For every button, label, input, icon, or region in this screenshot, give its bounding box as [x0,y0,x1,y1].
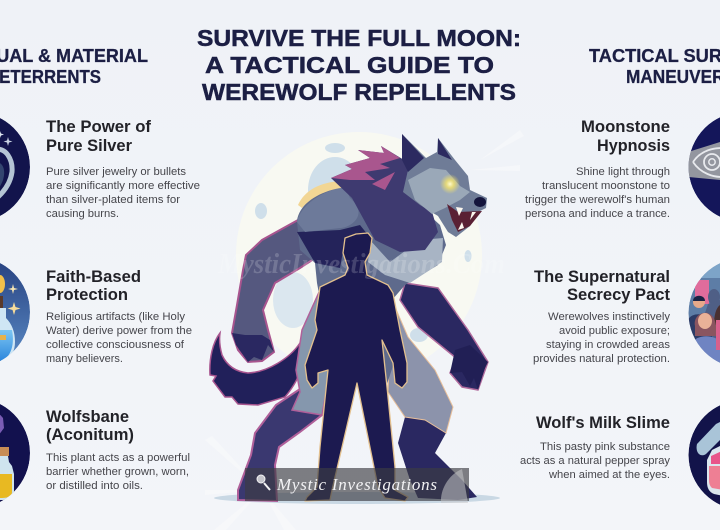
wolf right hand claws [450,345,488,390]
text: the power of pure silver: Pure Silver [46,137,133,155]
text: faith-based protection: Water) derive power from the [46,325,192,337]
wolf ears [402,134,452,172]
text: the supernatural secrecy pact [533,268,671,365]
wolf torso [297,170,446,390]
wolf mane highlights [331,146,400,190]
text: the power of pure silver: Pure silver jewelry or bullets [46,166,186,178]
banner text: Mystic Investigations [276,475,437,494]
text: wolfsbane: barrier whether grown, worn, [46,466,189,478]
text: wolf's milk slime [520,414,670,481]
text: the power of pure silver: causing burns. [46,208,119,220]
wolf left arm [232,220,320,362]
title [197,25,521,105]
illustration: werewolf [210,134,488,501]
wolf right lower leg [398,400,477,500]
text: faith-based protection: Religious artifacts (like Holy [46,311,185,323]
watermark: site name: MysticInvestigations.Com [217,249,505,280]
title: WEREWOLF REPELLENTS [202,79,516,105]
title: SURVIVE THE FULL MOON: [197,25,521,51]
wolf head [402,134,487,237]
text: faith-based protection: Faith-Based [46,268,141,286]
text: the supernatural secrecy pact: Werewolves instinctively [548,311,670,323]
text: faith-based protection: Protection [46,286,128,304]
text: the supernatural secrecy pact: staying in crowded areas [546,339,670,351]
watermark banner [245,468,469,503]
text: wolfsbane: or distilled into oils. [46,480,143,492]
text: wolfsbane: (Aconitum) [46,426,134,444]
icon: pink slime jar [688,400,720,510]
text: the supernatural secrecy pact: avoid public exposure; [559,325,670,337]
wolf right arm [400,283,488,390]
wolf nose [474,197,486,207]
text: the power of pure silver: than silver-plated items for [46,194,180,206]
wolf mouth [447,204,482,232]
text: moonstone hypnosis: Shine light through [576,166,670,178]
left column heading [0,46,148,87]
text: the power of pure silver: are significantly more effective [46,180,200,192]
icon: moonstone eye [688,117,720,217]
wolf face fur [408,168,470,214]
text: wolf's milk slime: This pasty pink substance [540,441,670,453]
illustration: moon behind werewolf [205,130,524,530]
text: wolfsbane: This plant acts as a powerful [46,452,190,464]
icon: crescent glint [441,469,468,503]
wolf mane [331,146,438,252]
text: faith-based protection: collective consciousness of [46,339,185,351]
icon: wolfsbane oil jar [0,404,30,502]
text: wolfsbane [46,408,190,492]
icon: silver pendant [0,118,30,216]
text: wolf's milk slime: Wolf's Milk Slime [536,414,670,432]
text: moonstone hypnosis: persona and induce a trance. [525,208,670,220]
wolf tail [210,333,304,405]
text: the supernatural secrecy pact: The Supernatural [534,268,670,286]
text: the supernatural secrecy pact: Secrecy Pact [567,286,671,304]
title: A TACTICAL GUIDE TO [205,52,494,78]
wolf shoulder shadow [297,225,372,268]
icon: magnifier [257,475,270,490]
text: wolf's milk slime: acts as a natural pepper spray [520,455,670,467]
text: the power of pure silver [46,118,200,220]
right column heading [589,46,720,87]
text: moonstone hypnosis: translucent moonstone to [542,180,670,192]
wolf hand claws [232,333,274,362]
text: moonstone hypnosis: trigger the werewolf's human [525,194,670,206]
wolf glowing eye [440,174,460,194]
icon: holy water bottle [0,263,30,361]
text: faith-based protection [46,268,192,365]
text: moonstone hypnosis [525,118,670,220]
wolf left leg [238,368,332,501]
text: the supernatural secrecy pact: provides natural protection. [533,353,670,365]
wolf chest [368,238,443,283]
text: the power of pure silver: The Power of [46,118,152,136]
text: wolfsbane: Wolfsbane [46,408,129,426]
text: faith-based protection: many believers. [46,353,123,365]
text: moonstone hypnosis: Moonstone [581,118,670,136]
wolf back rim [298,181,350,208]
wolf shoulder highlight [297,187,359,232]
text: wolf's milk slime: when aimed at the eyes. [548,469,670,481]
text: moonstone hypnosis: Hypnosis [597,137,670,155]
icon: crowd of people [688,263,720,363]
wolf teeth [456,207,476,230]
wolf left hip [292,290,330,415]
wolf right thigh [388,300,453,433]
illustration: human silhouette [305,233,408,501]
